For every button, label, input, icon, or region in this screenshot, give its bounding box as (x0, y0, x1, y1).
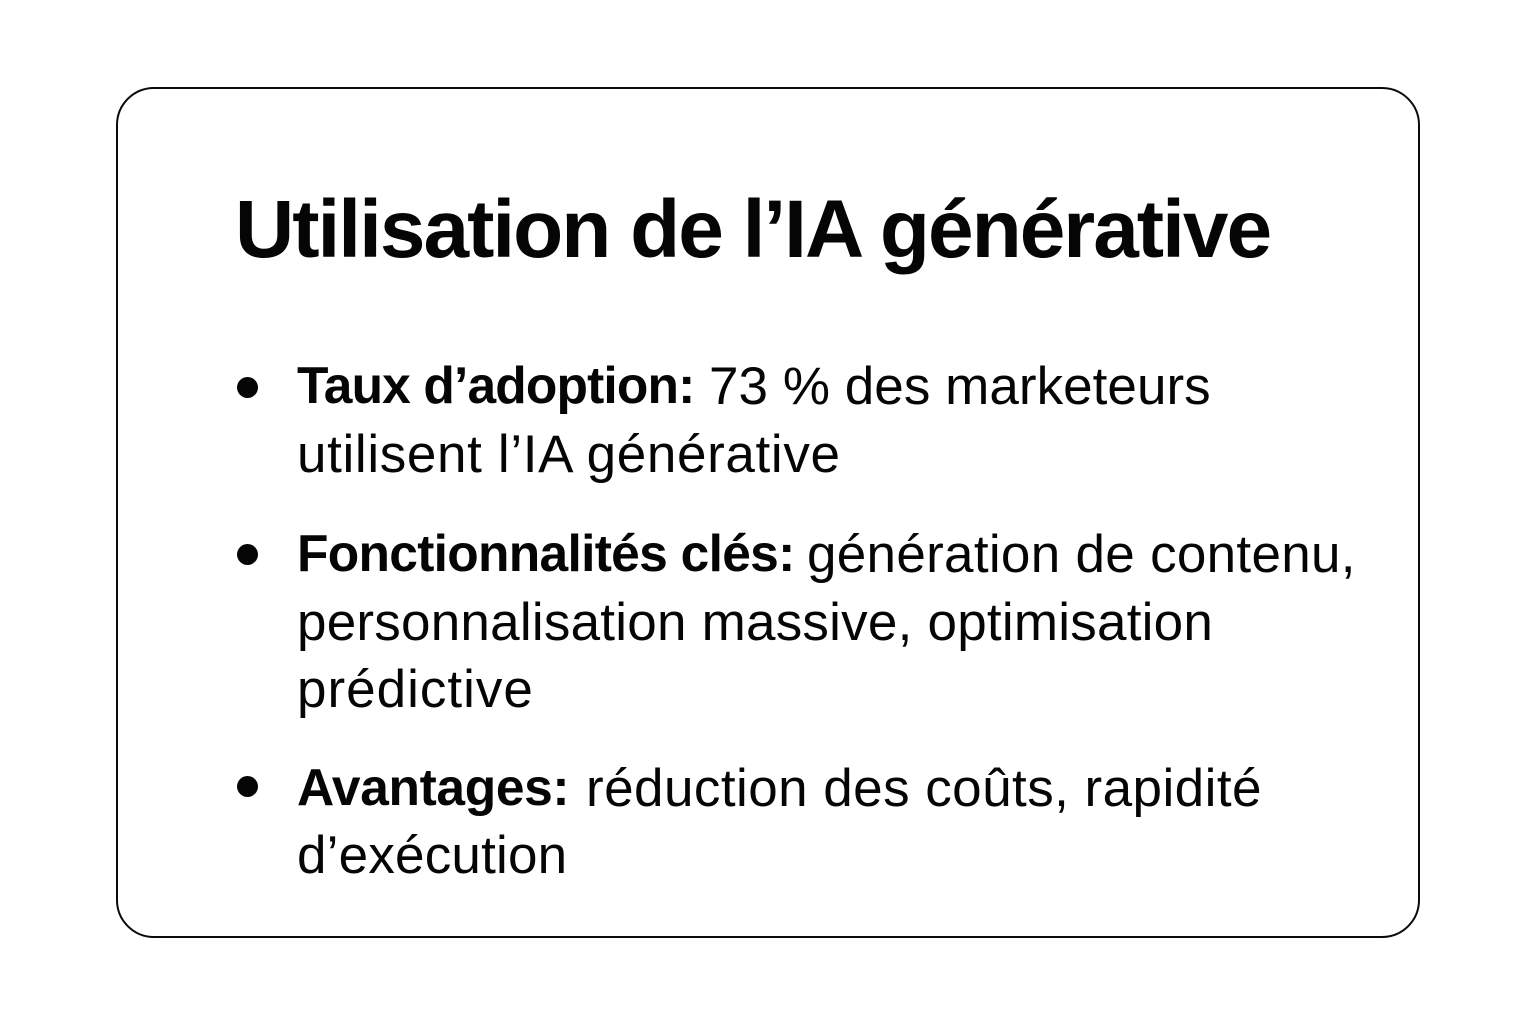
text block: adoption rate: utilisent l’IA générative (297, 425, 841, 484)
text block: adoption rate: 73 % des marketeurs (709, 357, 1211, 416)
title: Utilisation de l’IA générative (235, 184, 1270, 275)
text block: key features: Fonctionnalités clés: (297, 524, 795, 582)
text block: adoption rate (297, 356, 1211, 484)
icon: bullet 2 (237, 544, 258, 565)
text block: key features: personnalisation massive, optimisation (297, 593, 1213, 652)
icon: bullet 3 (237, 776, 258, 797)
text block: key features: prédictive (297, 660, 534, 719)
text block: key features: génération de contenu, (807, 525, 1356, 584)
text block: adoption rate: Taux d’adoption: (297, 356, 694, 414)
text block: key features (297, 524, 1356, 719)
text block: benefits: réduction des coûts, rapidité (586, 759, 1262, 818)
icon: bullet 1 (237, 377, 258, 398)
panel: card (116, 87, 1420, 938)
text block: benefits (297, 758, 1262, 885)
text block: benefits: d’exécution (297, 826, 567, 885)
text block: benefits: Avantages: (297, 758, 569, 816)
